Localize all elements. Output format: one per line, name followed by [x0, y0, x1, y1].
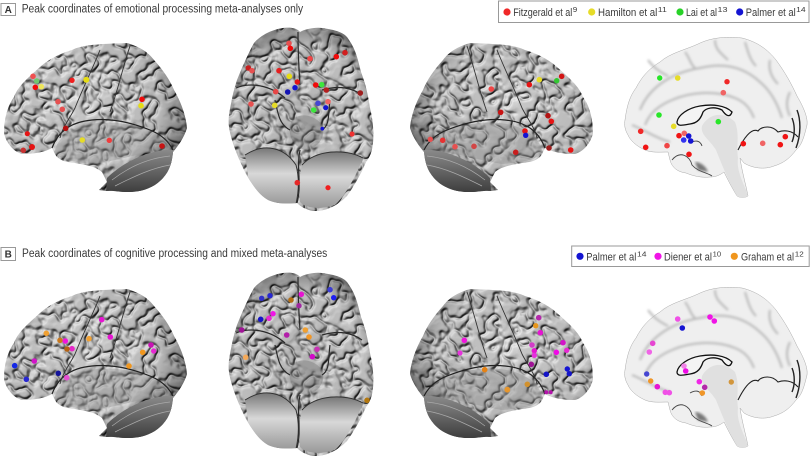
brain A: right lateral view with peaks	[405, 38, 597, 198]
brain A: ventral view with peaks	[224, 24, 378, 216]
panel label A: A	[5, 5, 12, 16]
panel A: emotional processing	[0, 1, 809, 216]
panel label A	[1, 4, 16, 16]
title B: Peak coordinates of cognitive processing and mixed meta-analyses	[22, 248, 328, 260]
legend A: 11	[658, 5, 667, 14]
brain A: sagittal view with peaks	[625, 37, 807, 198]
legend A: Lai et al	[686, 7, 717, 19]
panel label B: B	[5, 250, 12, 261]
brain B: right lateral view with peaks	[405, 284, 597, 444]
legend A: 9	[573, 5, 577, 14]
legend B: 10	[713, 250, 721, 258]
legend A: Palmer et al	[746, 7, 796, 19]
legend B: 12	[795, 250, 804, 258]
panel B: cognitive and mixed processing	[0, 246, 809, 459]
legend A: Hamilton et al	[598, 7, 657, 19]
legend B	[572, 246, 809, 266]
title A: Peak coordinates of emotional processing meta-analyses only	[22, 4, 303, 16]
brain B: sagittal view with peaks	[625, 287, 807, 448]
brain B: left lateral view with peaks	[0, 284, 192, 444]
legend B: Graham et al	[741, 252, 794, 264]
legend A: 13	[718, 5, 728, 14]
legend A: Fitzgerald et al	[513, 7, 572, 19]
legend B: Diener et al	[664, 252, 712, 264]
legend B: 14	[637, 250, 646, 258]
panel label B	[1, 248, 16, 261]
legend A: 14	[796, 5, 806, 14]
brain B: ventral view with peaks	[224, 269, 378, 459]
legend A	[498, 1, 809, 22]
brain A: left lateral view with peaks	[0, 38, 192, 198]
legend B: Palmer et al	[586, 252, 636, 264]
